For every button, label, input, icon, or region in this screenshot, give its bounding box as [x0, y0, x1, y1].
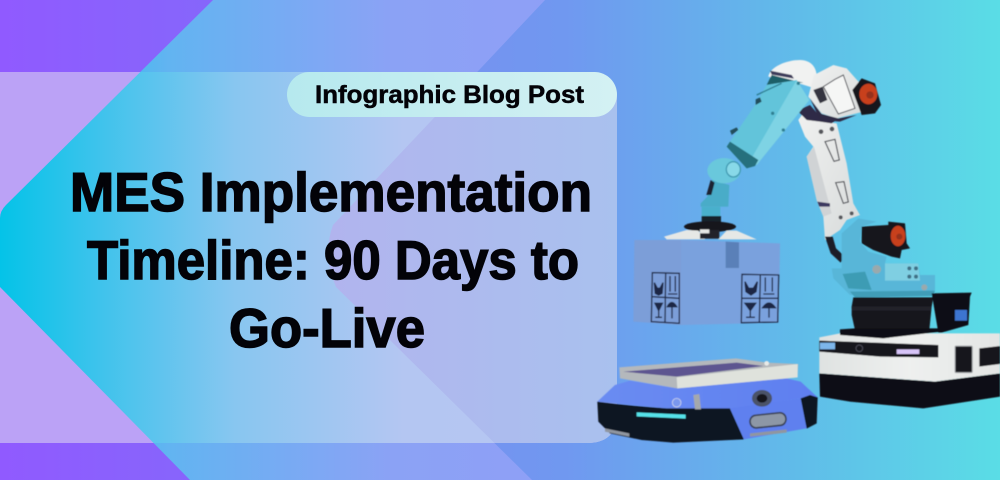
teal wrist — [701, 158, 741, 217]
black corner — [801, 395, 818, 429]
front AGV — [597, 358, 818, 443]
blue front panel — [730, 398, 807, 439]
cardboard box — [633, 240, 780, 325]
robot head — [808, 65, 863, 122]
shoulder motor — [862, 222, 910, 258]
front handle — [749, 412, 787, 429]
title: MES Implementation — [70, 161, 592, 223]
gripper — [664, 216, 757, 239]
lower black skirt — [819, 373, 1000, 408]
robot illustration — [597, 60, 1000, 443]
translucent title panel — [0, 72, 617, 443]
pill label: Infographic Blog Post — [315, 81, 585, 109]
bottom vents — [605, 428, 787, 437]
mounting plate — [840, 328, 942, 338]
lcd screen — [955, 310, 967, 321]
box handling symbols right — [741, 274, 779, 323]
rotary base — [852, 297, 933, 330]
arm base shoulder — [832, 218, 935, 297]
title — [70, 161, 592, 359]
teal forearm — [727, 80, 809, 168]
box tape — [726, 242, 739, 268]
robot arm rear link — [797, 105, 860, 263]
camera — [752, 390, 772, 407]
side port — [955, 346, 972, 373]
pill tag — [287, 72, 617, 117]
title: Timeline: 90 Days to — [87, 229, 579, 291]
box handling symbols left — [651, 273, 679, 323]
lilac light — [897, 349, 919, 354]
blue light — [820, 343, 835, 349]
red joint top — [852, 78, 881, 115]
white chassis — [819, 333, 1000, 382]
top conveyor plate — [619, 358, 798, 388]
side panel — [979, 346, 1000, 367]
robot elbow dome — [767, 60, 817, 88]
cyan light — [637, 412, 686, 419]
background: right chevron — [328, 0, 1000, 480]
title: Go-Live — [229, 297, 425, 359]
sensor band — [819, 341, 938, 357]
motor housing — [932, 293, 972, 333]
blue deck — [597, 378, 818, 409]
black lower body — [597, 402, 744, 443]
right AGV — [819, 293, 1000, 408]
